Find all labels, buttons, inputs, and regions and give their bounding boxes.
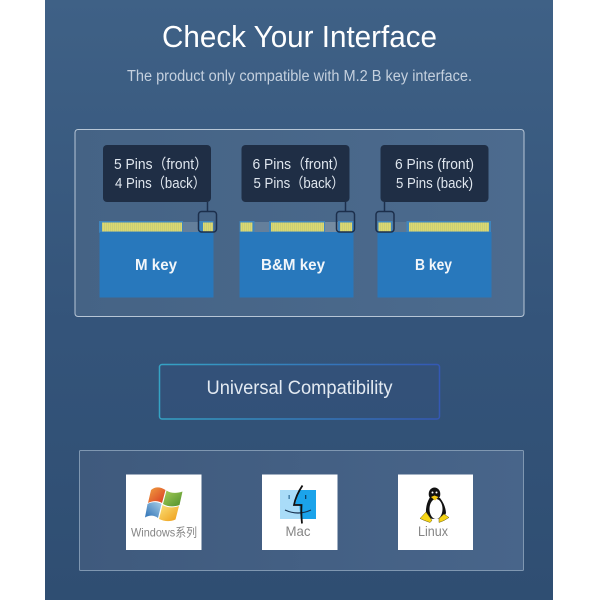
tooltip: M key pins [103,145,211,202]
M key board [99,221,214,298]
icon: Finder [280,486,316,524]
heading box: Universal Compatibility [160,364,440,419]
pin highlight: B&M key [336,202,354,232]
pin highlight: B key [376,202,394,232]
card: Mac: Mac [286,523,310,539]
B key group [376,145,492,298]
tooltip: M key pins: 5 Pins（front） [114,156,208,173]
icon: Windows flag [145,487,182,521]
pin highlight: M key [198,202,216,232]
tooltip: B&M key pins: 6 Pins（front） [252,156,346,173]
panel: operating systems [80,450,524,570]
B key board [378,221,492,298]
B&M key board [240,221,354,298]
M key group [99,145,216,298]
tooltip: B key pins: 6 Pins (front) [395,157,474,173]
heading box: Universal Compatibility: Universal Compatibility [206,377,393,399]
card: Mac [262,474,338,550]
card: Windows: Windows系列 [131,526,197,540]
tooltip: B&M key pins: 5 Pins（back） [254,175,344,192]
M key board: M key [135,257,177,274]
card: Linux [398,474,473,550]
tooltip: M key pins: 4 Pins（back） [115,175,206,192]
card: Windows [126,474,202,550]
tooltip: B key pins: 5 Pins (back) [396,176,473,192]
card: Linux: Linux [418,523,448,539]
title: Check Your Interface [162,19,437,54]
B key board: B key [415,257,452,274]
panel: key types [75,130,524,316]
tooltip: B&M key pins [242,145,350,202]
tooltip: B key pins [380,145,488,202]
B&M key board: B&M key [261,257,325,274]
subtitle: The product only compatible with M.2 B key interface. [127,68,472,85]
B&M key group [240,145,354,298]
icon: Tux penguin [420,488,449,522]
